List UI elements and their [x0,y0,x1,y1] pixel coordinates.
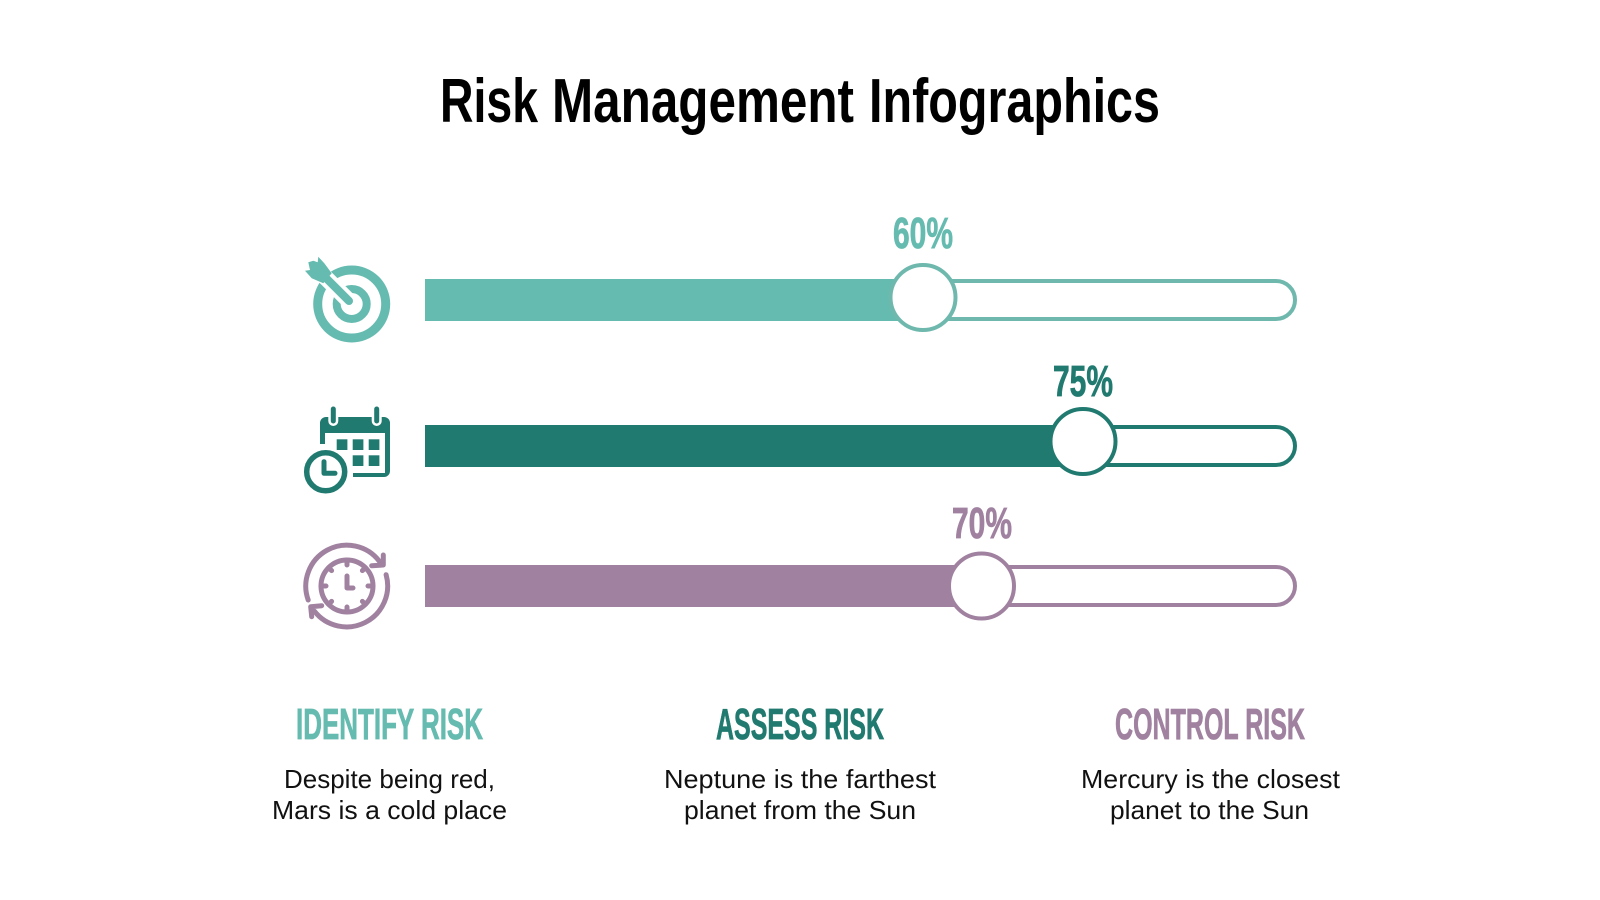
icon: clock with circular arrows [306,545,388,627]
heading: control risk: CONTROL RISK [1115,700,1305,749]
text: identify risk description: Mars is a cold place [272,795,507,825]
column: assess risk [664,700,937,825]
text: identify risk description [272,764,507,825]
heading: assess risk: ASSESS RISK [716,700,884,749]
title: Risk [440,67,538,136]
progress bar: assess risk 75% [425,409,1295,474]
text: control risk description [1081,764,1341,825]
text: control risk description: Mercury is the closest [1081,764,1341,794]
progress bar: identify risk 60% [425,265,1295,330]
text: identify risk description: Despite being red, [284,764,495,794]
percentage: 75%: 75% [1053,357,1113,406]
icon: calendar with clock [307,409,390,491]
progress bar: control risk 70% [425,554,1295,618]
text: assess risk description: planet from the Sun [684,795,916,825]
column: control risk [1081,700,1341,825]
title: Management [552,67,854,136]
percentage: 70%: 70% [952,499,1012,548]
heading: identify risk: IDENTIFY RISK [296,700,483,749]
column: identify risk [272,700,507,825]
title: Infographics [869,67,1160,136]
text: assess risk description [664,764,937,825]
title [440,67,1160,136]
icon: target with arrow [305,257,386,338]
text: assess risk description: Neptune is the farthest [664,764,937,794]
text: control risk description: planet to the Sun [1110,795,1309,825]
percentage: 60%: 60% [893,209,953,258]
